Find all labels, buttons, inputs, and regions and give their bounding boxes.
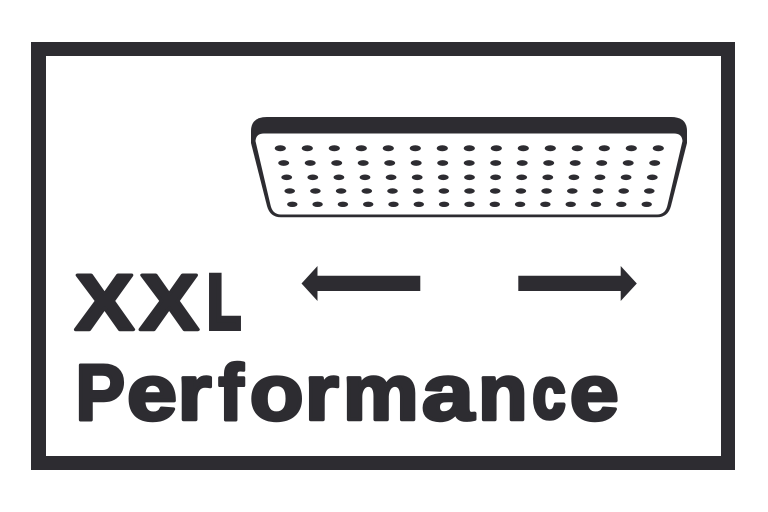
shower nozzles: [275, 145, 664, 207]
heading: Performance: o: [250, 347, 304, 436]
heading: Performance: r: [305, 347, 339, 436]
heading: XXL: L: [208, 260, 240, 344]
shower head face: [256, 134, 682, 214]
arrow: right: [518, 266, 637, 301]
heading: Performance: n: [478, 347, 528, 436]
icon: rain shower head: [251, 117, 687, 217]
arrow: left: [302, 266, 420, 301]
heading: Performance: c: [533, 354, 565, 434]
heading: Performance: e: [127, 347, 177, 436]
heading: Performance: a: [422, 347, 475, 436]
shower head body: [251, 117, 687, 217]
heading: Performance: m: [343, 347, 419, 436]
heading: Performance: f: [218, 347, 244, 436]
heading: XXL: X: [140, 257, 199, 346]
heading: Performance: P: [76, 347, 125, 436]
heading: XXL: X: [75, 257, 134, 346]
heading: Performance: r: [178, 347, 212, 436]
panel: frame border: [31, 42, 735, 470]
heading: Performance: e: [570, 347, 619, 436]
